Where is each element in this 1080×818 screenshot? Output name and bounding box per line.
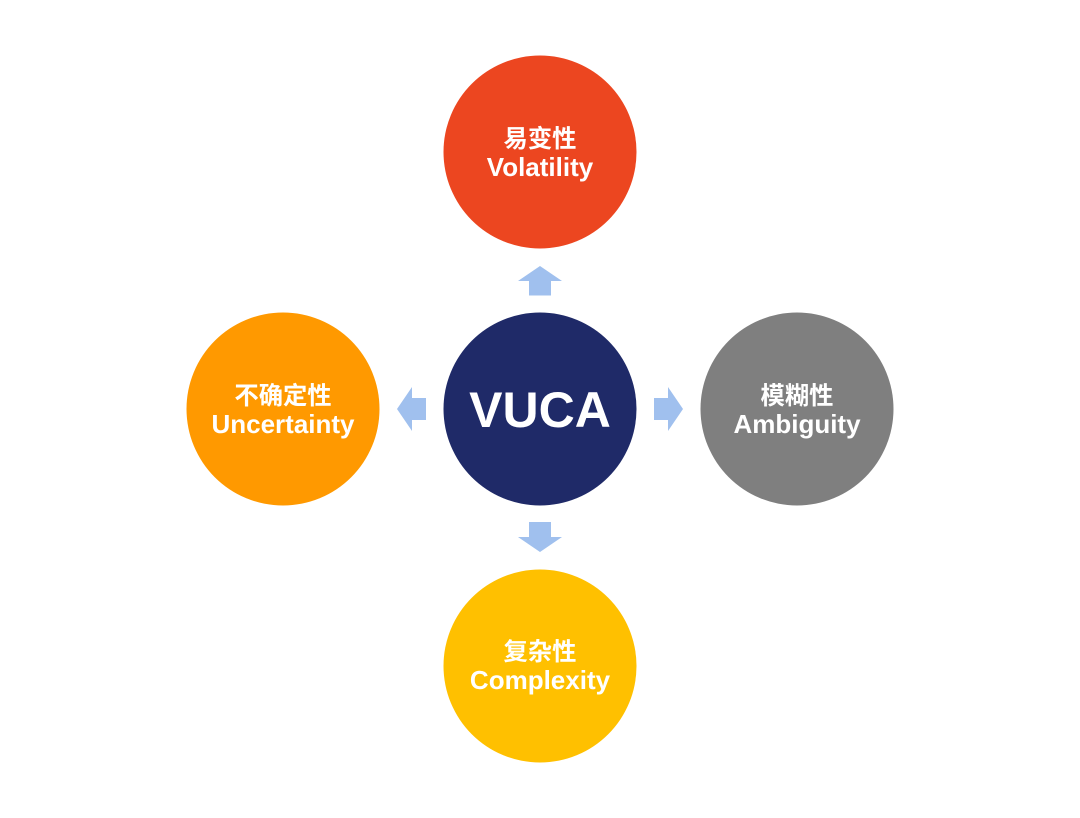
circle: VUCA center: VUCA	[469, 382, 611, 438]
circle: VUCA center	[444, 312, 636, 506]
circle: Complexity: Complexity	[470, 665, 611, 695]
circle: Volatility: Volatility	[487, 152, 594, 182]
circle: Uncertainty: 不确定性	[234, 376, 332, 411]
arrow: right	[654, 387, 683, 431]
arrow: up	[518, 266, 562, 296]
circle: Complexity	[444, 570, 636, 762]
circle: Volatility	[444, 56, 636, 248]
circle: Ambiguity: Ambiguity	[733, 409, 861, 439]
circle: Complexity: 复杂性	[504, 632, 576, 667]
circle: Ambiguity	[700, 312, 894, 506]
arrow: left	[397, 387, 426, 431]
circle: Volatility: 易变性	[504, 119, 576, 154]
circle: Ambiguity: 模糊性	[761, 376, 833, 411]
circle: Uncertainty	[186, 312, 380, 506]
circle: Uncertainty: Uncertainty	[211, 409, 355, 439]
arrow: down	[518, 522, 562, 552]
